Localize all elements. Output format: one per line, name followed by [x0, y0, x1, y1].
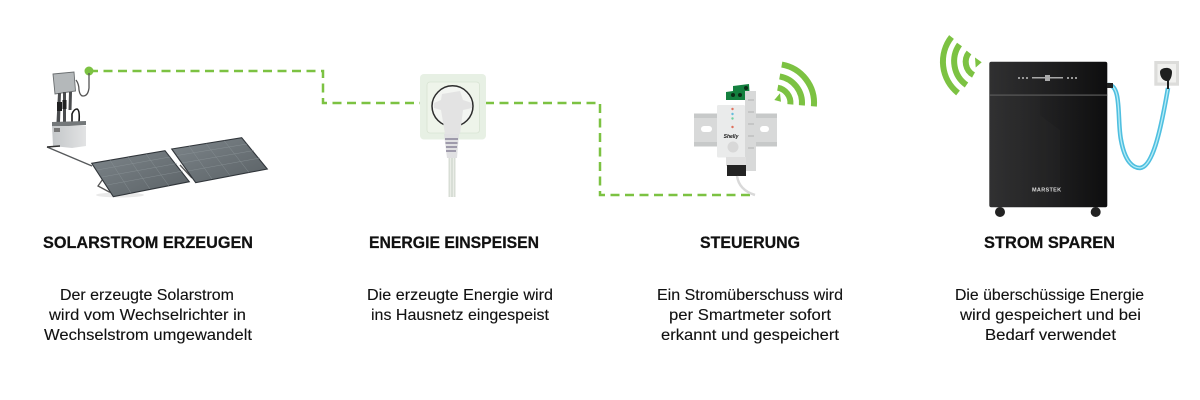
text block: step 3: per Smartmeter sofort: [669, 307, 832, 324]
terminals: [726, 84, 750, 100]
text block: step 3: Ein Stromüberschuss wird: [657, 287, 843, 304]
inverter: [53, 72, 76, 94]
connector: outlet to smart meter dashed line: [485, 103, 755, 195]
cable: [1108, 85, 1168, 168]
text block: step 1: [44, 287, 253, 344]
icon: wall outlet with plug: [420, 74, 486, 197]
text block: step 4: [955, 287, 1144, 344]
icon: wifi signal left: [943, 37, 982, 93]
brand: MARSTEK: [1032, 188, 1061, 194]
text block: step 2: Die erzeugte Energie wird: [367, 287, 553, 304]
heading: step 4: STROM SPAREN: [984, 233, 1115, 252]
heading: step 3: STEUERUNG: [700, 233, 800, 252]
battery cabinet: [989, 62, 1107, 207]
icon: solar system with inverter, battery and panels: [47, 66, 267, 198]
text block: step 1: wird vom Wechselrichter in: [48, 307, 246, 324]
connector: solar to outlet dashed line: [89, 71, 420, 103]
panel stands: [98, 160, 192, 194]
battery: [52, 121, 86, 127]
solar panel left: [92, 151, 189, 197]
solar panel right: [172, 138, 267, 183]
icon: smart meter on DIN rail: [694, 84, 777, 195]
heading: step 2: ENERGIE EINSPEISEN: [369, 233, 539, 252]
heading: step 1: SOLARSTROM ERZEUGEN: [43, 233, 253, 252]
text block: step 2: [367, 287, 553, 324]
meter body: [745, 91, 756, 171]
text block: step 1: Wechselstrom umgewandelt: [44, 327, 253, 344]
icon: wifi signal right: [774, 65, 814, 106]
icon: home battery with cable and socket: [989, 61, 1179, 217]
start dot: [84, 66, 94, 76]
text block: step 2: ins Hausnetz eingespeist: [371, 307, 550, 324]
wheels: [995, 207, 1005, 217]
text block: step 3: erkannt und gespeichert: [661, 327, 840, 344]
text block: step 4: wird gespeichert und bei: [959, 307, 1141, 324]
text block: step 4: Bedarf verwendet: [985, 327, 1117, 344]
text block: step 4: Die überschüssige Energie: [955, 287, 1144, 304]
text block: step 1: Der erzeugte Solarstrom: [60, 287, 234, 304]
din rail: [694, 114, 777, 146]
text block: step 3: [657, 287, 843, 344]
socket: [1154, 61, 1179, 86]
brand label: Shelly: [724, 134, 739, 140]
